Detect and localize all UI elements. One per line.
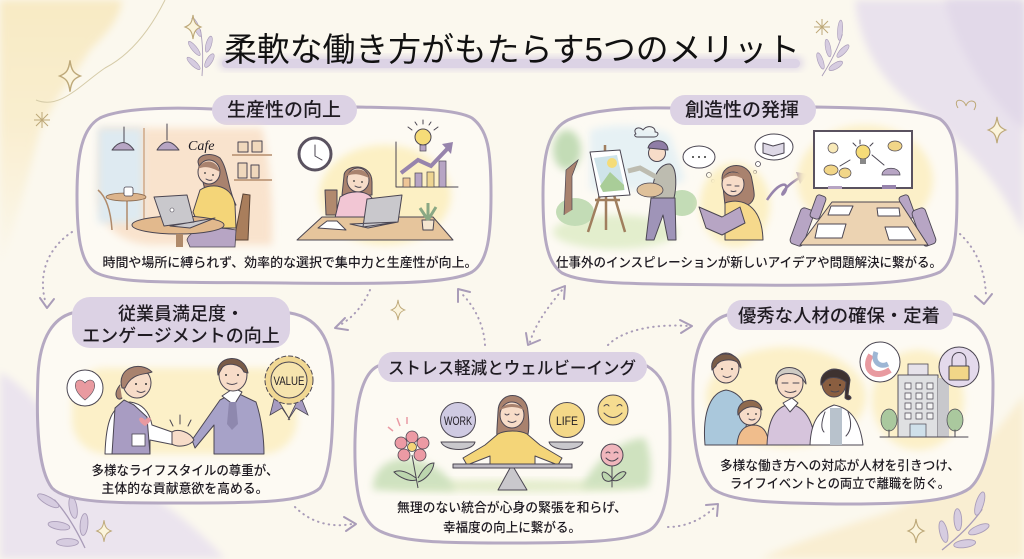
icon: life ball: LIFE xyxy=(556,414,578,428)
panel outline xyxy=(355,366,670,543)
panel outline xyxy=(693,314,993,504)
heading: 優秀な人材の確保・定着 xyxy=(738,305,940,326)
connecting dotted arrows xyxy=(40,232,992,531)
title: 柔軟な働き方がもたらす5つのメリット xyxy=(224,31,800,68)
panel: stress reduction and wellbeing: 幸福度の向上に繋がる。 xyxy=(443,520,581,535)
heading xyxy=(727,300,953,330)
icon: flower xyxy=(388,417,434,488)
icon: heart speech bubble xyxy=(67,370,103,406)
illustration: work life balance xyxy=(373,395,651,492)
icon: smile flower xyxy=(601,444,626,487)
heading: 生産性の向上 xyxy=(227,99,341,121)
illustration: woman working at cafe: Cafe xyxy=(188,139,214,154)
panel: creativity xyxy=(543,95,957,285)
panel outline xyxy=(543,107,957,285)
trees and bushes xyxy=(553,127,697,226)
chart xyxy=(396,142,458,187)
heading: ストレス軽減とウェルビーイング xyxy=(388,359,636,378)
icon: work ball: WORK xyxy=(444,414,472,428)
icon: life ball xyxy=(550,402,584,438)
icon: smile yellow xyxy=(598,395,628,425)
illustration: woman working at desk with chart xyxy=(297,120,458,245)
panel: talent retention xyxy=(693,300,993,504)
heading xyxy=(72,297,290,348)
heading: 創造性の発揮 xyxy=(685,99,799,121)
illustration: painter with easel xyxy=(553,125,697,249)
heading: 従業員満足度・ xyxy=(118,304,244,324)
description: 多様な働き方への対応が人材を引きつけ、 xyxy=(720,458,960,473)
illustration: thought bubbles xyxy=(683,134,793,182)
illustration: diverse staff xyxy=(704,347,866,447)
panel: talent retention: ライフイベントとの両立で離職を防ぐ。 xyxy=(730,476,950,491)
illustration: meeting room and whiteboard xyxy=(789,125,937,247)
panel: stress reduction and wellbeing xyxy=(355,352,670,543)
heading: エンゲージメントの向上 xyxy=(82,326,280,346)
heading xyxy=(212,95,357,125)
heading xyxy=(670,95,816,125)
panel outline xyxy=(37,313,333,503)
panel outline xyxy=(77,107,491,283)
description: 時間や場所に縛られず、効率的な選択で集中力と生産性が向上。 xyxy=(102,255,478,270)
illustration: handshake xyxy=(67,356,313,454)
panel: productivity xyxy=(77,95,491,283)
illustration: woman reading xyxy=(699,163,770,247)
illustration: woman working at cafe xyxy=(98,124,272,247)
panel: employee engagement: 主体的な貢献意欲を高める。 xyxy=(102,481,268,496)
description: 仕事外のインスピレーションが新しいアイデアや問題解決に繋がる。 xyxy=(556,255,942,270)
icon: value badge: VALUE xyxy=(274,374,304,388)
icon: lightbulb xyxy=(408,120,438,151)
arrow: swirl to whiteboard xyxy=(767,172,808,200)
icon: clock xyxy=(299,138,331,170)
icon: magnet bubble xyxy=(860,342,900,382)
heading xyxy=(378,352,647,382)
description: 多様なライフスタイルの尊重が、 xyxy=(92,463,278,478)
icon: value badge xyxy=(265,356,313,420)
illustration: hospital xyxy=(860,342,979,450)
icon: lock bubble xyxy=(939,347,979,387)
panel: employee engagement xyxy=(37,297,333,503)
description: 無理のない統合が心身の緊張を和らげ、 xyxy=(397,500,627,515)
icon: work ball xyxy=(440,402,476,438)
